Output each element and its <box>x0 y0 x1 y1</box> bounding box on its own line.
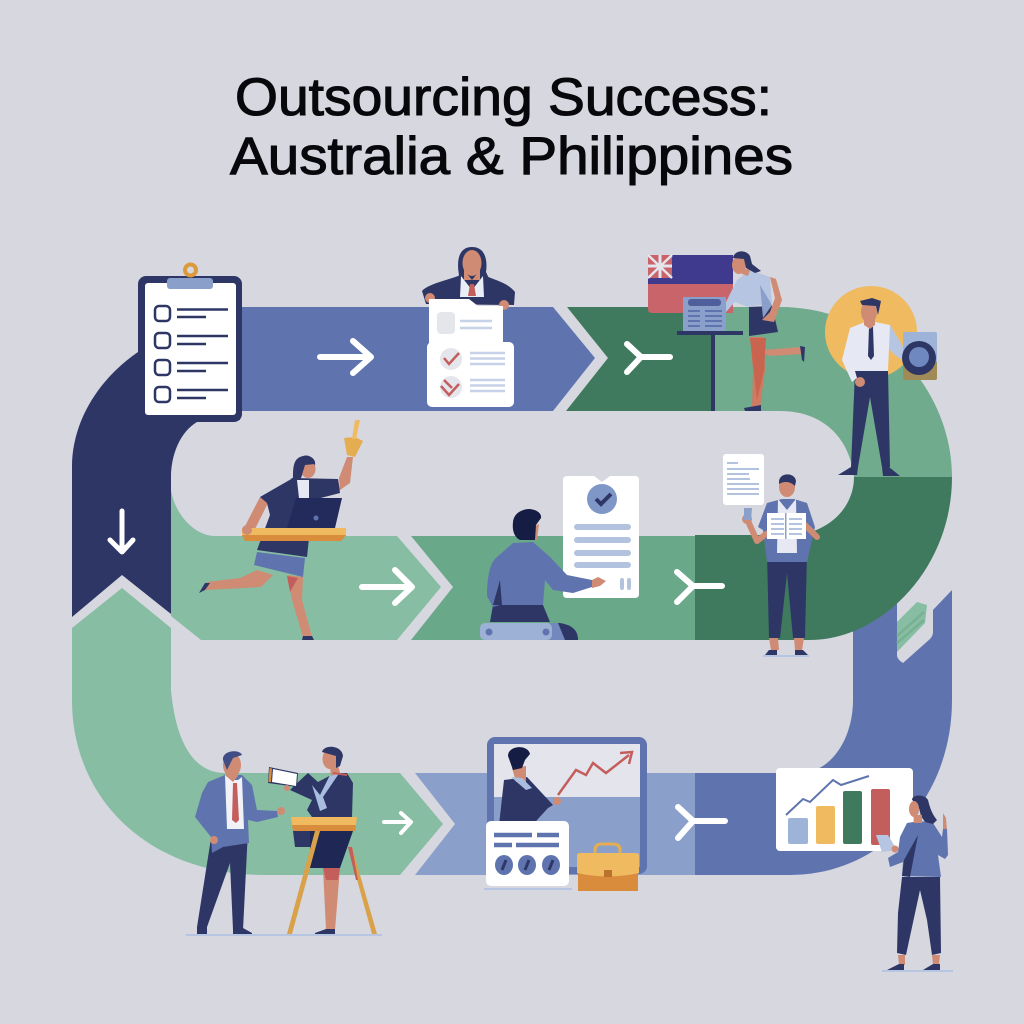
path segment: dark green top chevron <box>566 307 712 411</box>
icon: approval document <box>563 476 639 598</box>
icon: seat <box>480 623 578 640</box>
panel: presentation screen <box>487 737 647 874</box>
path segment: dark green right curve <box>695 477 952 640</box>
icon: document stack <box>427 299 514 407</box>
icon: speaker device <box>902 332 937 380</box>
chart: rising red arrow <box>558 752 632 795</box>
figure: woman with tablet at podium <box>268 747 377 934</box>
icon: data card <box>484 821 572 890</box>
arrow: forked middle <box>677 572 722 602</box>
figure: woman at standing desk <box>723 251 805 411</box>
chart: bar chart panel <box>776 768 913 851</box>
icon: briefcase <box>577 844 639 891</box>
figure: presenter <box>499 747 561 825</box>
icon: standing desk with screen <box>677 297 743 411</box>
figure: woman viewing chart <box>876 796 948 971</box>
figure: running woman with laptop <box>199 420 363 640</box>
figure: seated man <box>480 509 606 640</box>
chart bars <box>788 789 890 845</box>
icon: flag <box>648 255 733 313</box>
path segment: light green top right curve <box>712 307 952 477</box>
icon: tablet <box>268 767 298 791</box>
icon: gold board <box>242 525 346 541</box>
figure: man with speaker <box>825 286 937 476</box>
title <box>230 68 793 186</box>
arrow: forked lower <box>678 807 725 838</box>
icon: handheld paper <box>876 835 898 852</box>
icon: gold circle <box>825 286 917 378</box>
ground line: reading man <box>763 655 809 657</box>
path segment: light green middle chevron <box>171 490 441 640</box>
arrow: middle right <box>362 570 412 603</box>
path segment: medium green middle chevron <box>411 536 695 640</box>
ground line: right figure <box>882 970 953 972</box>
icon: clipboard checklist <box>138 264 242 422</box>
figure: man reading book <box>723 454 817 655</box>
arrow: forked top <box>627 344 670 372</box>
path segment: lower right blue curve <box>695 590 952 875</box>
arrow: small lower <box>384 813 411 833</box>
chart trend line <box>786 776 869 815</box>
figure: man in blue suit <box>195 751 285 935</box>
title: Outsourcing Success: <box>235 68 772 127</box>
arrow: top right <box>320 341 371 373</box>
figure legs <box>197 830 248 930</box>
icon: green chevron badge <box>897 602 927 652</box>
title: Australia & Philippines <box>230 127 793 186</box>
path segment: light green lower left curve <box>72 588 443 875</box>
path segment: periwinkle lower chevron <box>415 773 695 875</box>
process path <box>72 307 952 875</box>
figure: woman holding documents <box>422 247 515 310</box>
arrow: down <box>110 511 133 552</box>
icon: podium <box>287 817 377 934</box>
path segment: navy start curve <box>72 340 240 617</box>
icon: note document <box>723 454 764 505</box>
ground line: left pair <box>186 934 382 936</box>
path segment: blue top chevron <box>240 307 595 411</box>
icon: laptop <box>287 498 342 528</box>
icon: gold hand pointer <box>344 420 363 457</box>
